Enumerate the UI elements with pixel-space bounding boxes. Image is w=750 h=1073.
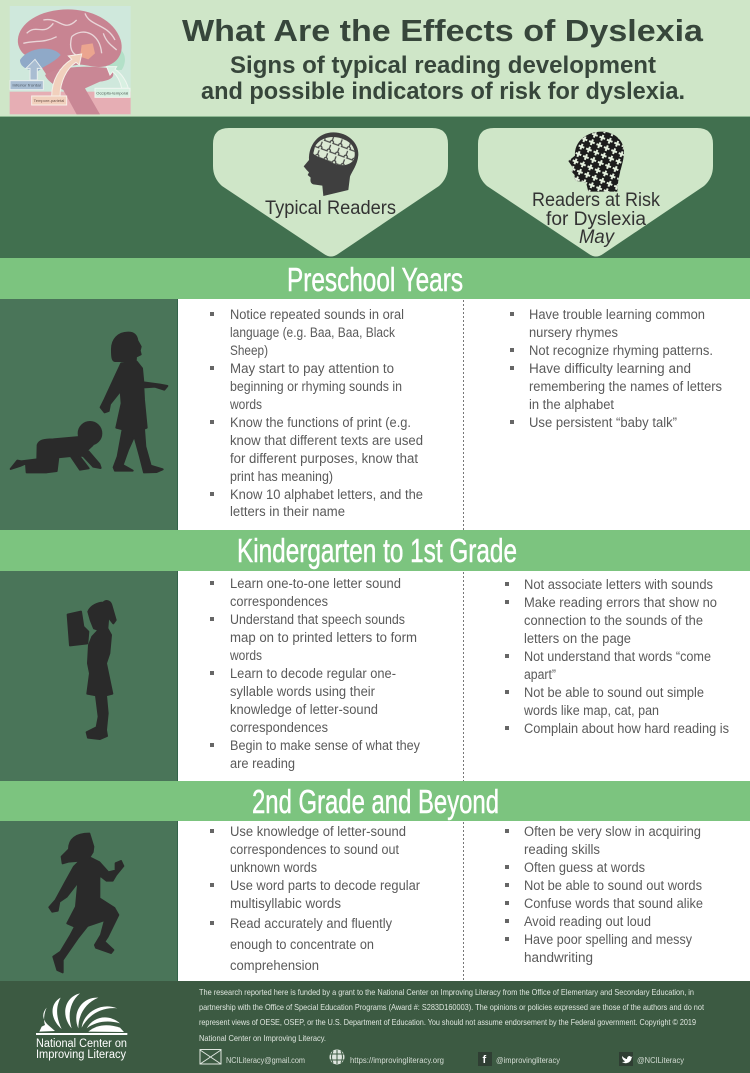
band heading: Kindergarten to 1st Grade [237, 532, 517, 569]
band heading: Preschool Years [287, 261, 463, 298]
list: typical readers preschool: Know the functions of print (e.g. [230, 415, 411, 430]
contact: facebook: f [482, 1054, 486, 1066]
list: typical readers preschool: Notice repeated sounds in oral [230, 307, 404, 322]
contact: website: https://improvingliteracy.org [350, 1055, 444, 1065]
list: typical readers kindergarten: map on to printed letters to form [230, 630, 417, 645]
band heading [0, 781, 750, 821]
list: typical readers 2nd grade: Use knowledge of letter-sound [230, 824, 406, 839]
contact: facebook: @improvingliteracy [496, 1055, 561, 1065]
icon: head with puzzle pattern [568, 132, 624, 192]
list: at risk 2nd grade: Often guess at words [524, 860, 645, 875]
text block: funding disclaimer [199, 988, 705, 1043]
list: at risk 2nd grade: Often be very slow in acquiring [524, 824, 701, 839]
label: readers at risk: May [579, 227, 615, 248]
list: at risk 2nd grade: handwriting [524, 950, 593, 965]
list: at risk kindergarten: letters on the page [524, 631, 631, 646]
logo: National Center on Improving Literacy: Improving Literacy [36, 1049, 126, 1061]
list: typical readers kindergarten: knowledge of letter-sound [230, 702, 378, 717]
contact: email: NCILiteracy@gmail.com [226, 1055, 305, 1065]
panel: readers at risk [478, 128, 713, 256]
panel: 2nd grade content [178, 821, 750, 981]
icon: head with puzzle brain [304, 132, 358, 196]
panel: preschool content [178, 299, 750, 530]
list: typical readers preschool: Sheep) [230, 343, 268, 358]
list: typical readers 2nd grade: Read accurately and fluently [230, 916, 392, 931]
list: typical readers 2nd grade: Use word parts to decode regular [230, 878, 420, 893]
subtitle: and possible indicators of risk for dyslexia. [201, 78, 685, 105]
text block: funding disclaimer: The research reported here is funded by a grant to the National Center on Improving Literacy from the Office of Elementary and Secondary Education, in [199, 988, 694, 997]
list: at risk kindergarten: connection to the sounds of the [524, 613, 703, 628]
list: typical readers kindergarten: Learn to decode regular one- [230, 666, 396, 681]
list: at risk kindergarten: Not associate letters with sounds [524, 577, 713, 592]
list: typical readers preschool: letters in their name [230, 504, 345, 519]
list: at risk preschool: Have trouble learning common [529, 307, 705, 322]
list: typical readers kindergarten: Learn one-to-one letter sound [230, 576, 401, 591]
band heading: 2nd Grade and Beyond [252, 783, 499, 820]
list: typical readers kindergarten: Understand that speech sounds [230, 612, 405, 627]
list: typical readers kindergarten [210, 576, 420, 771]
contact: facebook [478, 1052, 561, 1066]
list: typical readers kindergarten: syllable words using their [230, 684, 375, 699]
label: readers at risk: for Dyslexia [546, 209, 646, 230]
panel: kindergarten content [178, 571, 750, 781]
list: at risk preschool [510, 307, 722, 430]
section: kindergarten to 1st grade [0, 530, 750, 781]
panel: typical readers [213, 128, 448, 256]
list: typical readers preschool: know that different texts are used [230, 433, 423, 448]
list: at risk kindergarten: apart” [524, 667, 556, 682]
label: readers at risk [532, 190, 660, 248]
list: at risk preschool: Not recognize rhyming patterns. [529, 343, 713, 358]
icon: brain illustration: Inferior frontal [12, 83, 41, 88]
list: at risk kindergarten: Not understand that words “come [524, 649, 711, 664]
list: at risk 2nd grade: Have poor spelling and messy [524, 932, 692, 947]
list: at risk 2nd grade [505, 824, 703, 965]
list: at risk preschool: Use persistent “baby talk” [529, 415, 677, 430]
list: typical readers kindergarten: are reading [230, 756, 295, 771]
list: typical readers 2nd grade: comprehension [230, 958, 319, 973]
list: at risk kindergarten: Not be able to sound out simple [524, 685, 704, 700]
subtitle [201, 52, 685, 105]
list: typical readers preschool: words [229, 397, 262, 412]
band heading [0, 258, 750, 299]
list: at risk kindergarten: Complain about how hard reading is [524, 721, 729, 736]
panel: silhouette [0, 821, 178, 981]
list: at risk kindergarten: words like map, cat, pan [523, 703, 659, 718]
list: at risk 2nd grade: Confuse words that sound alike [524, 896, 703, 911]
list: typical readers preschool: Know 10 alphabet letters, and the [230, 487, 423, 502]
label: typical readers: Typical Readers [265, 198, 396, 219]
list: typical readers 2nd grade: correspondences to sound out [230, 842, 399, 857]
title: What Are the Effects of Dyslexia [182, 13, 704, 48]
text block: funding disclaimer: partnership with the Office of Special Education Programs (Award #: S283D160003). The opinions or policies expressed are those of the authors and do not [199, 1003, 705, 1012]
list: typical readers preschool: May start to pay attention to [230, 361, 394, 376]
icon: brain illustration: Occipito-temporal [96, 90, 128, 95]
logo: National Center on Improving Literacy: National Center on [36, 1038, 127, 1050]
list: typical readers kindergarten: correspondences [230, 594, 328, 609]
panel: silhouette [0, 571, 178, 781]
list: at risk kindergarten [505, 577, 729, 736]
footer panel [0, 981, 750, 1073]
list: at risk preschool: Have difficulty learning and [529, 361, 691, 376]
section: 2nd grade and beyond [0, 781, 750, 981]
header panel [0, 0, 750, 116]
label: readers at risk: Readers at Risk [532, 190, 660, 211]
list: typical readers preschool: for different purposes, know that [230, 451, 418, 466]
list: at risk preschool: nursery rhymes [529, 325, 618, 340]
icon: running girl silhouette [49, 834, 123, 972]
text block: funding disclaimer: National Center on Improving Literacy. [199, 1034, 326, 1043]
icon: brain illustration [10, 6, 131, 114]
list: typical readers preschool: print has meaning) [230, 469, 333, 484]
list: typical readers kindergarten: Begin to make sense of what they [230, 738, 420, 753]
logo: National Center on Improving Literacy [36, 993, 127, 1061]
list: typical readers preschool [210, 307, 423, 519]
section: preschool years [0, 258, 750, 530]
list: at risk 2nd grade: Avoid reading out loud [524, 914, 651, 929]
contact: website [330, 1050, 444, 1065]
icon: girl reading silhouette [68, 601, 116, 739]
contact: twitter: @NCILiteracy [637, 1055, 685, 1065]
list: typical readers 2nd grade: multisyllabic words [230, 896, 341, 911]
list: typical readers preschool: beginning or rhyming sounds in [230, 379, 402, 394]
icon: toddler and baby silhouettes [11, 333, 167, 472]
icon: brain illustration: Tempore-parietal [34, 98, 64, 103]
list: at risk 2nd grade: reading skills [524, 842, 600, 857]
contact: twitter [619, 1052, 685, 1066]
list: at risk 2nd grade: Not be able to sound out words [524, 878, 702, 893]
list: at risk preschool: in the alphabet [529, 397, 614, 412]
list: typical readers kindergarten: correspondences [230, 720, 328, 735]
list: typical readers 2nd grade: enough to concentrate on [230, 937, 374, 952]
contact: email [200, 1050, 305, 1065]
band heading [0, 530, 750, 571]
text block: funding disclaimer: represent views of OESE, OSEP, or the U.S. Department of Education. You should not assume endorsement by the Federal government. Copyright © 2019 [199, 1018, 696, 1027]
subtitle: Signs of typical reading development [230, 52, 656, 79]
list: typical readers kindergarten: words [229, 648, 262, 663]
column header panel [0, 116, 750, 258]
list: at risk kindergarten: Make reading errors that show no [524, 595, 717, 610]
panel: silhouette [0, 299, 178, 530]
list: at risk preschool: remembering the names of letters [529, 379, 722, 394]
list: typical readers 2nd grade [210, 824, 420, 973]
list: typical readers 2nd grade: unknown words [230, 860, 317, 875]
list: typical readers preschool: language (e.g. Baa, Baa, Black [230, 325, 395, 340]
